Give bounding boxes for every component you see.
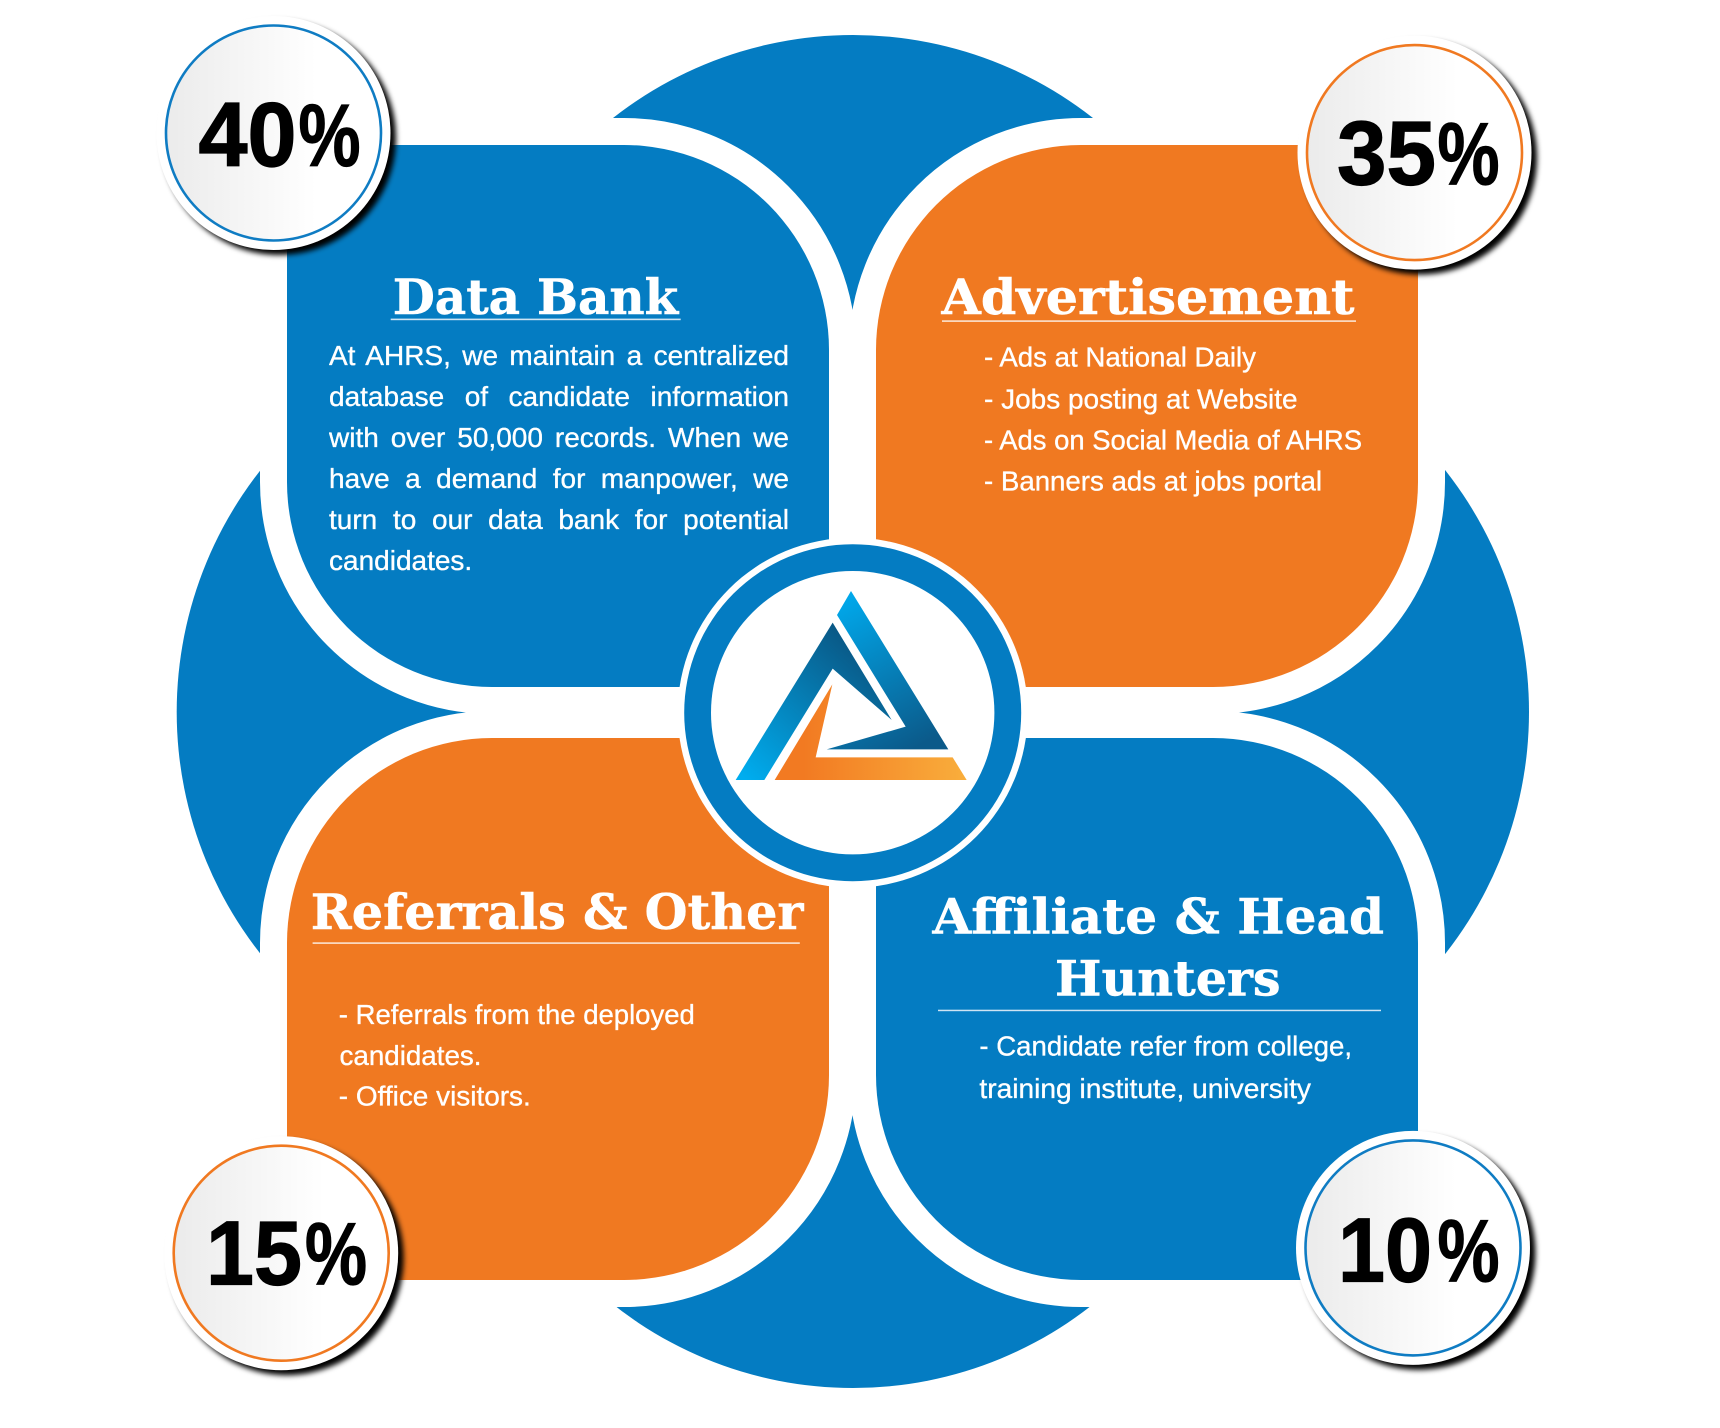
badge: 15% [164,1136,404,1375]
list: affiliate sources [979,1030,1352,1104]
list: affiliate sources: training institute, university [979,1073,1311,1104]
text block: Data Bank description [329,335,791,585]
list: referral sources: - Referrals from the deployed [339,999,695,1030]
heading: Affiliate & Head Hunters: Affiliate & Head [931,887,1384,945]
text block: Data Bank description: with over 50,000 records. When we [329,422,789,453]
value: 15%: 15 [206,1204,302,1305]
heading: Affiliate & Head Hunters [931,887,1384,1007]
text block: Data Bank description: database of candidate information [329,381,789,412]
text block: Data Bank description: candidates. [329,545,472,576]
value: 35%: 35 [1337,103,1436,204]
list: referral sources: - Office visitors. [339,1081,531,1112]
list: advertisement channels: - Ads on Social Media of AHRS [984,424,1362,456]
panel: Data Bank [287,145,829,687]
list: affiliate sources: - Candidate refer from college, [979,1030,1352,1061]
badge: 35% [1298,36,1537,275]
background blue petals [177,35,1529,1388]
text block: Data Bank description: turn to our data bank for potential [329,504,789,535]
icon: triangle logo [736,591,967,780]
heading: Advertisement: Advertisement [940,268,1355,326]
text block: Data Bank description: At AHRS, we maintain a centralized [329,340,789,371]
badge: 40% [156,16,396,255]
panel: Referrals & Other [287,738,829,1280]
list: referral sources: candidates. [340,1040,482,1071]
panel: Affiliate & Head Hunters [876,738,1418,1280]
heading: Data Bank: Data Bank [393,268,679,326]
value: 15%: % [305,1205,367,1304]
list: advertisement channels: - Jobs posting at Website [984,383,1298,414]
heading: Affiliate & Head Hunters: Hunters [1055,949,1281,1007]
value: 40%: 40 [198,85,296,186]
value: 40%: % [298,86,360,185]
list: advertisement channels: - Ads at National Daily [984,342,1256,373]
badge: 10% [1296,1131,1536,1370]
center logo medallion [678,538,1028,888]
value: 35%: % [1438,104,1500,203]
heading: Referrals & Other: Referrals & Other [311,883,805,941]
text block: Data Bank description: have a demand for manpower, we [329,463,789,494]
list: advertisement channels [984,342,1362,496]
value: 10%: % [1438,1201,1500,1300]
value: 10%: 10 [1338,1200,1432,1301]
panel: Advertisement [876,145,1418,687]
list: referral sources [339,999,695,1112]
list: advertisement channels: - Banners ads at jobs portal [984,465,1322,496]
